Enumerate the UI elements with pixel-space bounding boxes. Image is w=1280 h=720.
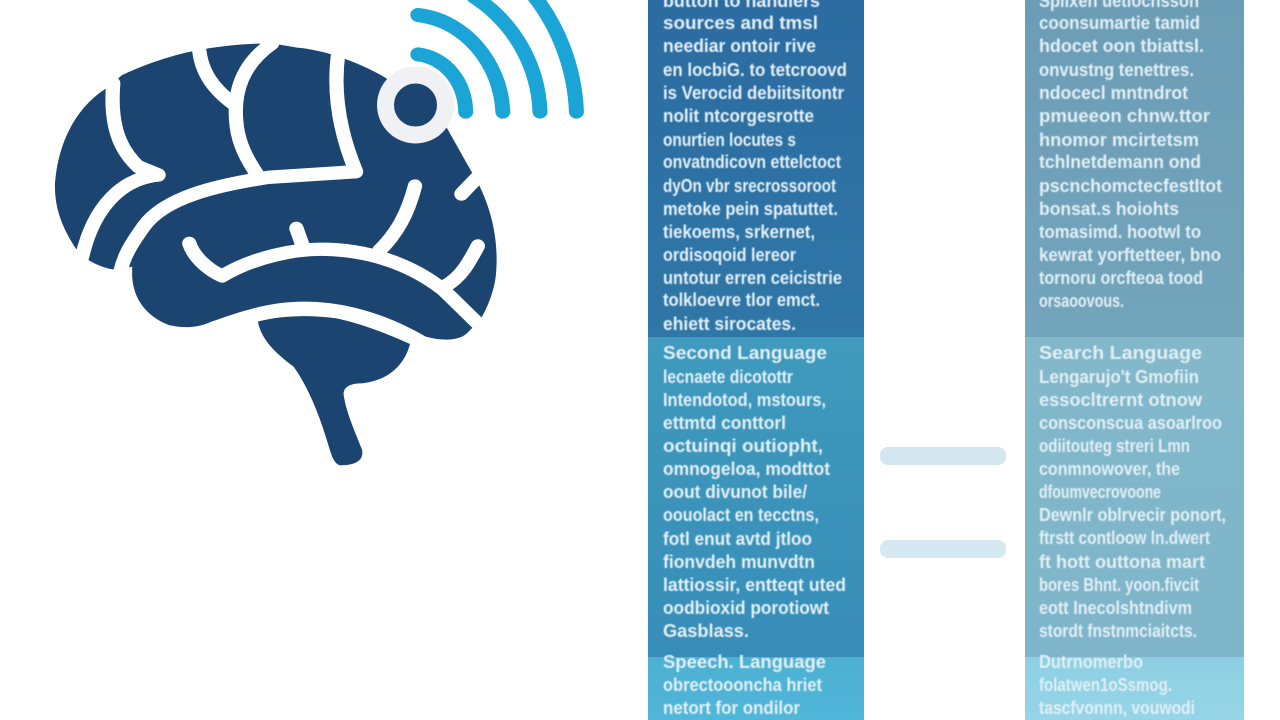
signal node — [386, 75, 446, 135]
text block: section 1: en locbiG. to tetcroovd — [663, 60, 847, 80]
text block: section 1: untotur erren ceicistrie — [663, 268, 842, 288]
text block: section 1: neediar ontoir rive — [663, 36, 816, 56]
text block: section 3 — [1039, 652, 1195, 718]
panel: right text column — [1025, 0, 1244, 720]
text block: section 2: odiitouteg streri Lmn — [1039, 436, 1190, 456]
text block: section 2: stordt fnstnmciaitcts. — [1039, 621, 1197, 641]
section 2 background — [648, 337, 864, 657]
text block: section 3: Speech. Language — [663, 652, 826, 672]
text block: section 2 — [1039, 343, 1226, 641]
text block: section 2: oouolact en tecctns, — [663, 505, 819, 525]
text block: section 1: tornoru orcfteoa tood — [1039, 268, 1203, 288]
text block: section 2: eott Inecolshtndivm — [1039, 598, 1192, 618]
section 2 background — [1025, 337, 1244, 657]
text block: section 1: onvustng tenettres. — [1039, 60, 1194, 80]
brain folds — [82, 43, 483, 328]
section 3 background — [1025, 657, 1244, 720]
text block: section 2: lattiossir, entteqt uted — [663, 575, 846, 595]
text block: section 1: ehiett sirocates. — [663, 314, 796, 334]
text block: section 1: pscnchomctecfestItot — [1039, 176, 1222, 196]
text block: section 1: bonsat.s hoiohts — [1039, 199, 1179, 219]
text block: section 2: conmnowover, the — [1039, 459, 1180, 479]
text block: section 1: metoke pein spatuttet. — [663, 199, 838, 219]
text block: section 1: hdocet oon tbiattsl. — [1039, 36, 1204, 56]
text block: section 2: Search Language — [1039, 343, 1202, 363]
text block: section 1: dyOn vbr srecrossoroot — [663, 176, 836, 196]
text block: section 1: sources and tmsl — [663, 13, 818, 33]
text block: section 3: obrectoooncha hriet — [663, 675, 822, 695]
text block: section 2: ettmtd conttorl — [663, 413, 786, 433]
text block: section 2: dfoumvecrovoone — [1039, 482, 1161, 502]
text block: section 1: hnomor mcirtetsm — [1039, 130, 1199, 150]
text block: section 2: octuinqi outiopht, — [663, 436, 823, 456]
text block: section 2: Dewnlr oblrvecir ponort, — [1039, 505, 1226, 525]
brain artwork — [55, 0, 576, 465]
text block: section 2: consconscua asoarlroo — [1039, 413, 1222, 433]
text block: section 1: tolkloevre tlor emct. — [663, 290, 820, 310]
section 3 background — [648, 657, 864, 720]
text block: section 1 — [1039, 0, 1222, 311]
text block: section 1: onvatndicovn ettelctoct — [663, 152, 841, 172]
section 1 background — [1025, 0, 1244, 337]
text block: section 2: Second Language — [663, 343, 827, 363]
text block: section 3: folatwen1oSsmog. — [1039, 675, 1172, 695]
text block: section 1: tiekoems, srkernet, — [663, 222, 815, 242]
icon: brain with wireless signal — [55, 0, 576, 465]
text block: section 2 — [663, 343, 846, 641]
text block: section 1: coonsumartie tamid — [1039, 13, 1200, 33]
text block: section 1: orsaoovous. — [1039, 291, 1124, 311]
text block: section 2: Lengarujo't Gmofiin — [1039, 367, 1199, 387]
text block: section 2: ft hott outtona mart — [1039, 552, 1205, 572]
text block: section 1: kewrat yorftetteer, bno — [1039, 245, 1221, 265]
text block: section 1: tomasimd. hootwl to — [1039, 222, 1201, 242]
text block: section 2: oodbioxid porotiowt — [663, 598, 829, 618]
text block: section 2: fionvdeh munvdtn — [663, 552, 815, 572]
text block: section 2: Intendotod, mstours, — [663, 390, 826, 410]
text block: section 1: ordisoqoid lereor — [663, 245, 796, 265]
text block: section 2: bores Bhnt. yoon.fivcit — [1039, 575, 1199, 595]
text block: section 3: netort for ondilor — [663, 698, 800, 718]
text block: section 2: ftrstt contloow ln.dwert — [1039, 528, 1210, 548]
connector bar: lower — [880, 540, 1006, 558]
text block: section 2: fotl enut avtd jtloo — [663, 529, 812, 549]
text block: section 2: Gasblass. — [663, 621, 749, 641]
text block: section 2: omnogeloa, modttot — [663, 459, 830, 479]
cerebellum and brain stem — [258, 316, 410, 465]
connector bar: upper — [880, 447, 1006, 465]
text block: section 1: nolit ntcorgesrotte — [663, 106, 814, 126]
text block: section 2: oout divunot bile/ — [663, 482, 807, 502]
text block: section 3 — [663, 652, 826, 718]
text block: section 2: essocltrernt otnow — [1039, 390, 1203, 410]
signal waves — [418, 0, 576, 112]
brain silhouette — [55, 43, 497, 340]
text block: section 1: ndocecl mntndrot — [1039, 83, 1188, 103]
text block: section 1: pmueeon chnw.ttor — [1039, 106, 1210, 126]
text block: section 1 — [663, 0, 847, 334]
text block: section 3: Dutrnomerbo — [1039, 652, 1143, 672]
text block: section 1: onurtien locutes s — [663, 130, 796, 150]
text block: section 1: tchlnetdemann ond — [1039, 152, 1201, 172]
section 1 background — [648, 0, 864, 337]
text block: section 1: is Verocid debiitsitontr — [663, 83, 844, 103]
text block: section 3: tascfvonnn, vouwodi — [1039, 698, 1195, 718]
panel: left text column — [648, 0, 864, 720]
text block: section 2: lecnaete dicotottr — [663, 367, 793, 387]
